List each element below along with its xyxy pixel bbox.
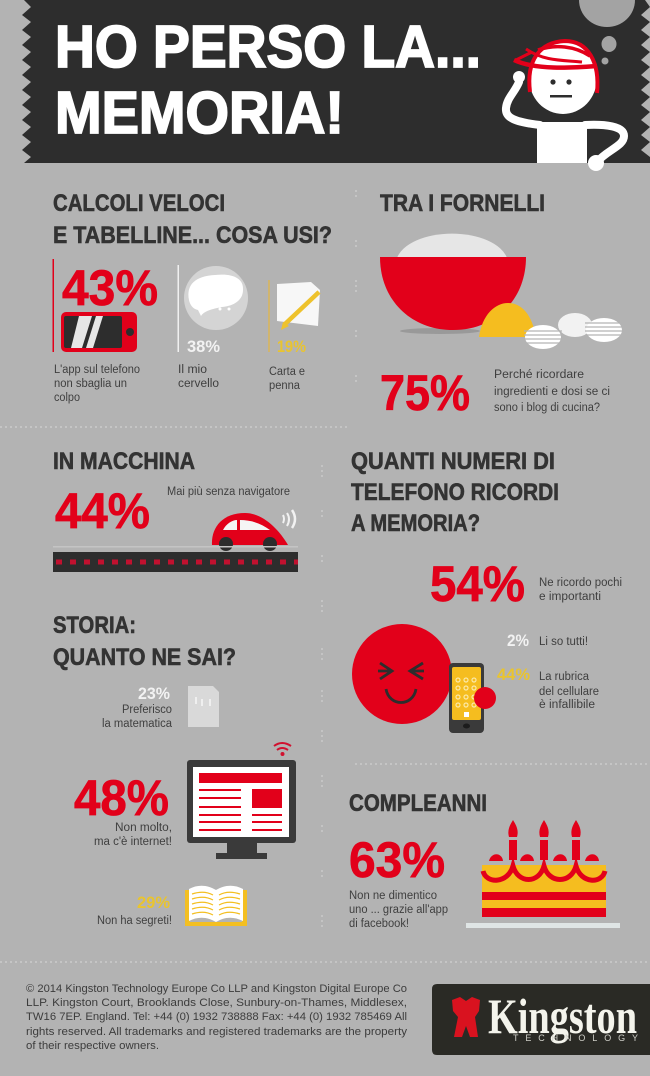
stat: 38% brain: 38% — [187, 337, 220, 356]
heading: QUANTO NE SAI? — [53, 644, 236, 671]
stat: 54%: 54% — [430, 556, 525, 612]
stat: 48% internet: 48% — [74, 770, 169, 826]
stat: 43% phone app: L'app sul telefono — [54, 364, 140, 376]
stat: 38% brain — [178, 265, 248, 390]
panel: storia — [53, 612, 296, 927]
text: blog di cucina: ingredienti e dosi se ci — [494, 386, 610, 398]
icon: phone — [61, 312, 137, 352]
stat: 48% internet: Non molto, — [115, 822, 172, 834]
icon: computer monitor — [187, 760, 296, 859]
heading: IN MACCHINA — [53, 448, 195, 475]
stat: 54%: e importanti — [539, 591, 601, 603]
footer copyright text: LLP. Kingston Court, Brooklands Close, Sunbury-on-Thames, Middlesex, — [26, 997, 407, 1009]
stat: 23% matematica: 23% — [138, 684, 170, 703]
stat: 2%: 2% — [507, 631, 529, 650]
stat: 44% rubrica: La rubrica — [539, 671, 590, 683]
icon: memory card — [188, 686, 219, 727]
title: HO PERSO LA... — [55, 14, 481, 80]
icon: paper and pencil — [277, 282, 320, 330]
stat: 44% rubrica: 44% — [497, 665, 530, 684]
stat: 54% — [430, 556, 622, 612]
stat: 43% phone app: non sbaglia un — [54, 378, 127, 390]
stat: 23% matematica: la matematica — [102, 718, 173, 730]
footer copyright text: © 2014 Kingston Technology Europe Co LLP and Kingston Digital Europe Co — [26, 983, 407, 995]
title — [55, 14, 481, 146]
stat: 38% brain: cervello — [178, 378, 219, 390]
panel: compleanni — [349, 790, 620, 930]
stat: 43% phone app: colpo — [54, 392, 80, 404]
heading — [351, 448, 559, 537]
stat: 44% rubrica: è infallibile — [539, 699, 595, 711]
text: facebook: uno ... grazie all'app — [349, 904, 448, 916]
icon: smartphone — [449, 663, 496, 733]
footer copyright text: rights reserved. All trademarks and registered trademarks are the property — [26, 1026, 408, 1038]
logo: Kingston Technology — [432, 984, 650, 1055]
stat: 29% book: 29% — [137, 893, 170, 912]
stat: 23% matematica: Preferisco — [122, 704, 172, 716]
stat: 38% brain: Il mio — [178, 364, 207, 376]
heading — [53, 190, 332, 249]
stat: 44%: 44% — [55, 483, 150, 539]
text: blog di cucina — [494, 369, 610, 414]
icon: dough and eggs — [479, 303, 623, 349]
icon: thought bubbles — [579, 0, 635, 64]
text: blog di cucina: sono i blog di cucina? — [494, 402, 600, 414]
stat: 19% paper and pen: penna — [269, 380, 301, 392]
heading: STORIA: — [53, 612, 136, 639]
heading: TELEFONO RICORDI — [351, 479, 559, 506]
icon: mixing bowl — [380, 234, 526, 334]
stat: 54%: Ne ricordo pochi — [539, 577, 622, 589]
header banner — [22, 0, 650, 171]
panel: numeri di telefono — [351, 448, 622, 733]
heading: A MEMORIA? — [351, 510, 480, 537]
panel: in macchina — [53, 448, 298, 572]
stat: 2% — [507, 631, 588, 650]
stat: 2%: Li so tutti! — [539, 636, 588, 648]
tagline: TECHNOLOGY — [513, 1033, 638, 1043]
heading: E TABELLINE... COSA USI? — [53, 222, 332, 249]
stat: 63%: 63% — [349, 832, 445, 888]
stat: 29% book — [97, 886, 247, 927]
stat: 75%: 75% — [380, 365, 470, 421]
stat: 29% book: Non ha segreti! — [97, 915, 172, 927]
heading: QUANTI NUMERI DI — [351, 448, 555, 475]
stat: 44% rubrica: del cellulare — [539, 686, 599, 698]
text: facebook: di facebook! — [349, 918, 409, 930]
heading — [53, 612, 236, 671]
footer copyright text — [26, 983, 408, 1052]
text: navigatore: Mai più senza navigatore — [167, 486, 290, 498]
stat: 19% paper and pen: 19% — [277, 337, 306, 356]
icon: head with speech bubble — [184, 266, 248, 330]
icon: car — [212, 510, 295, 551]
panel: calcoli veloci — [52, 190, 332, 404]
text: blog di cucina: Perché ricordare — [494, 369, 584, 381]
stat: 43% phone app: 43% — [62, 260, 158, 316]
icon: confused person — [506, 41, 624, 171]
icon: birthday cake — [466, 820, 620, 928]
text: facebook — [349, 890, 448, 930]
icon: red figure — [452, 997, 480, 1037]
icon: open book — [185, 886, 247, 926]
stat: 43% phone app — [52, 259, 158, 404]
title: MEMORIA! — [55, 80, 344, 146]
heading: TRA I FORNELLI — [380, 190, 545, 217]
icon: smiling red face — [352, 624, 452, 724]
stat: 48% internet: ma c'è internet! — [94, 836, 172, 848]
stat: 19% paper and pen: Carta e — [269, 366, 305, 378]
heading: CALCOLI VELOCI — [53, 190, 225, 217]
panel: tra i fornelli — [380, 190, 623, 421]
text: facebook: Non ne dimentico — [349, 890, 437, 902]
stat: 23% matematica — [102, 684, 219, 730]
footer copyright text: TW16 7EP. England. Tel: +44 (0) 1932 738888 Fax: +44 (0) 1932 785469 All — [26, 1011, 407, 1023]
heading: COMPLEANNI — [349, 790, 487, 817]
road — [53, 546, 298, 572]
stat: 44% rubrica — [497, 665, 599, 711]
icon: wifi — [274, 743, 291, 755]
stat: 19% paper and pen — [268, 280, 320, 392]
footer copyright text: of their respective owners. — [26, 1040, 159, 1052]
stat: 48% internet — [74, 743, 296, 859]
